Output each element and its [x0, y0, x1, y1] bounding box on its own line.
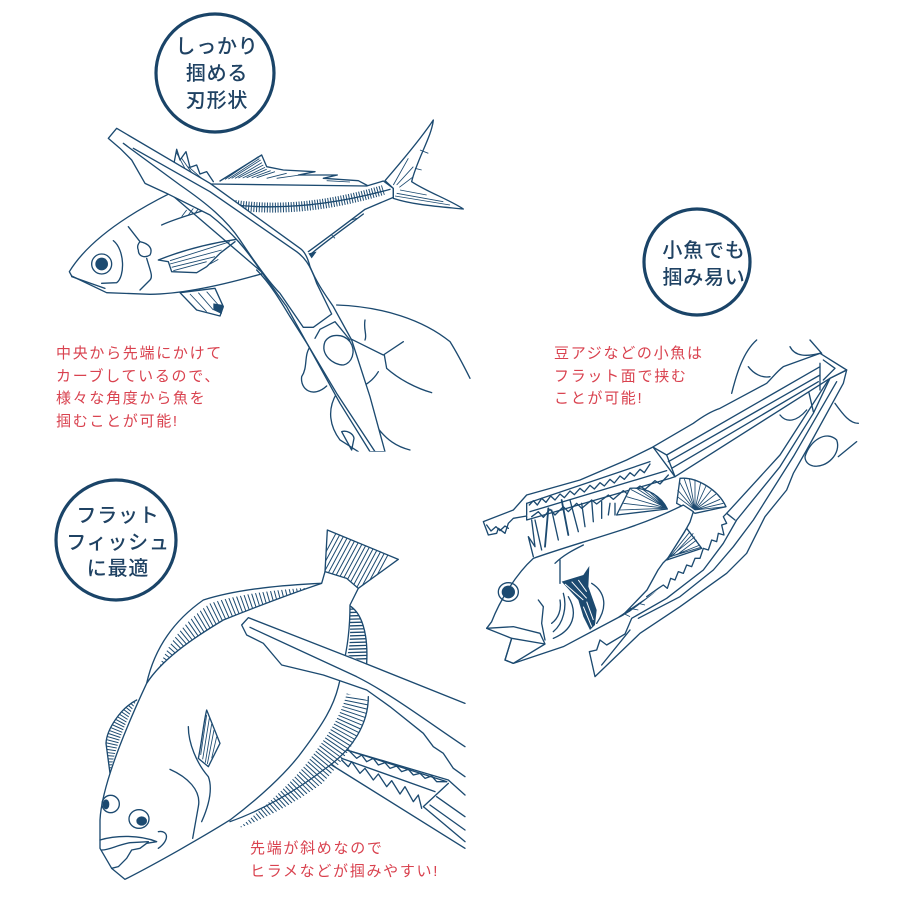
fish tail section and fins — [173, 120, 463, 258]
badge: しっかり掴める刃形状: 刃形状 — [186, 89, 248, 112]
caption: small fish: フラット面で挟む — [554, 368, 688, 385]
wrasse tail fan — [677, 478, 726, 513]
hand behind the handle — [732, 340, 858, 466]
caption: curved tip — [56, 345, 223, 430]
caption: curved tip: カーブしているので、 — [56, 367, 221, 385]
illustration: flounder gripped by angled tong tip — [100, 530, 465, 879]
caption: flounder: ヒラメなどが掴みやすい! — [250, 863, 439, 880]
badge: しっかり掴める刃形状: 掴める — [186, 62, 248, 85]
caption: flounder: 先端が斜めなので — [250, 840, 384, 857]
caption: small fish: ことが可能! — [554, 390, 643, 407]
caption: small fish — [554, 345, 704, 407]
caption: curved tip: 中央から先端にかけて — [56, 345, 223, 362]
tong handle — [653, 353, 847, 478]
wrasse fish with fins — [487, 488, 702, 663]
badge: しっかり掴める刃形状 — [156, 14, 274, 132]
badge: 小魚でも掴み易い: 掴み易い — [662, 266, 746, 289]
badge: フラットフィッシュに最適: フラット — [76, 505, 160, 527]
badge: フラットフィッシュに最適: フィッシュ — [66, 532, 170, 554]
badge: 小魚でも掴み易い: 小魚でも — [662, 239, 746, 262]
caption: small fish: 豆アジなどの小魚は — [554, 345, 704, 362]
caption: curved tip: 掴むことが可能! — [56, 413, 179, 430]
curved tongs — [108, 128, 385, 452]
upper jaw teeth band — [483, 447, 675, 535]
badge: フラットフィッシュに最適: に最適 — [87, 557, 149, 580]
caption: flounder — [250, 840, 439, 880]
badge: フラットフィッシュに最適 — [56, 480, 176, 600]
illustration: small fish held by flat tong section — [483, 340, 858, 677]
badge: 小魚でも掴み易い — [644, 209, 750, 315]
illustration: horse mackerel gripped by curved tongs — [69, 120, 470, 452]
flounder body with eyes and mouth — [100, 572, 358, 879]
tong lower arm with serrated teeth — [589, 370, 847, 677]
hand behind the tongs — [302, 305, 470, 452]
caption: curved tip: 様々な角度から魚を — [56, 390, 206, 407]
lower tong arm behind fish — [332, 750, 465, 848]
badge: しっかり掴める刃形状: しっかり — [175, 36, 259, 58]
flat tong upper arm — [242, 618, 465, 777]
fish front body with eye and fins — [69, 193, 263, 316]
flounder fins hatched — [106, 530, 398, 828]
